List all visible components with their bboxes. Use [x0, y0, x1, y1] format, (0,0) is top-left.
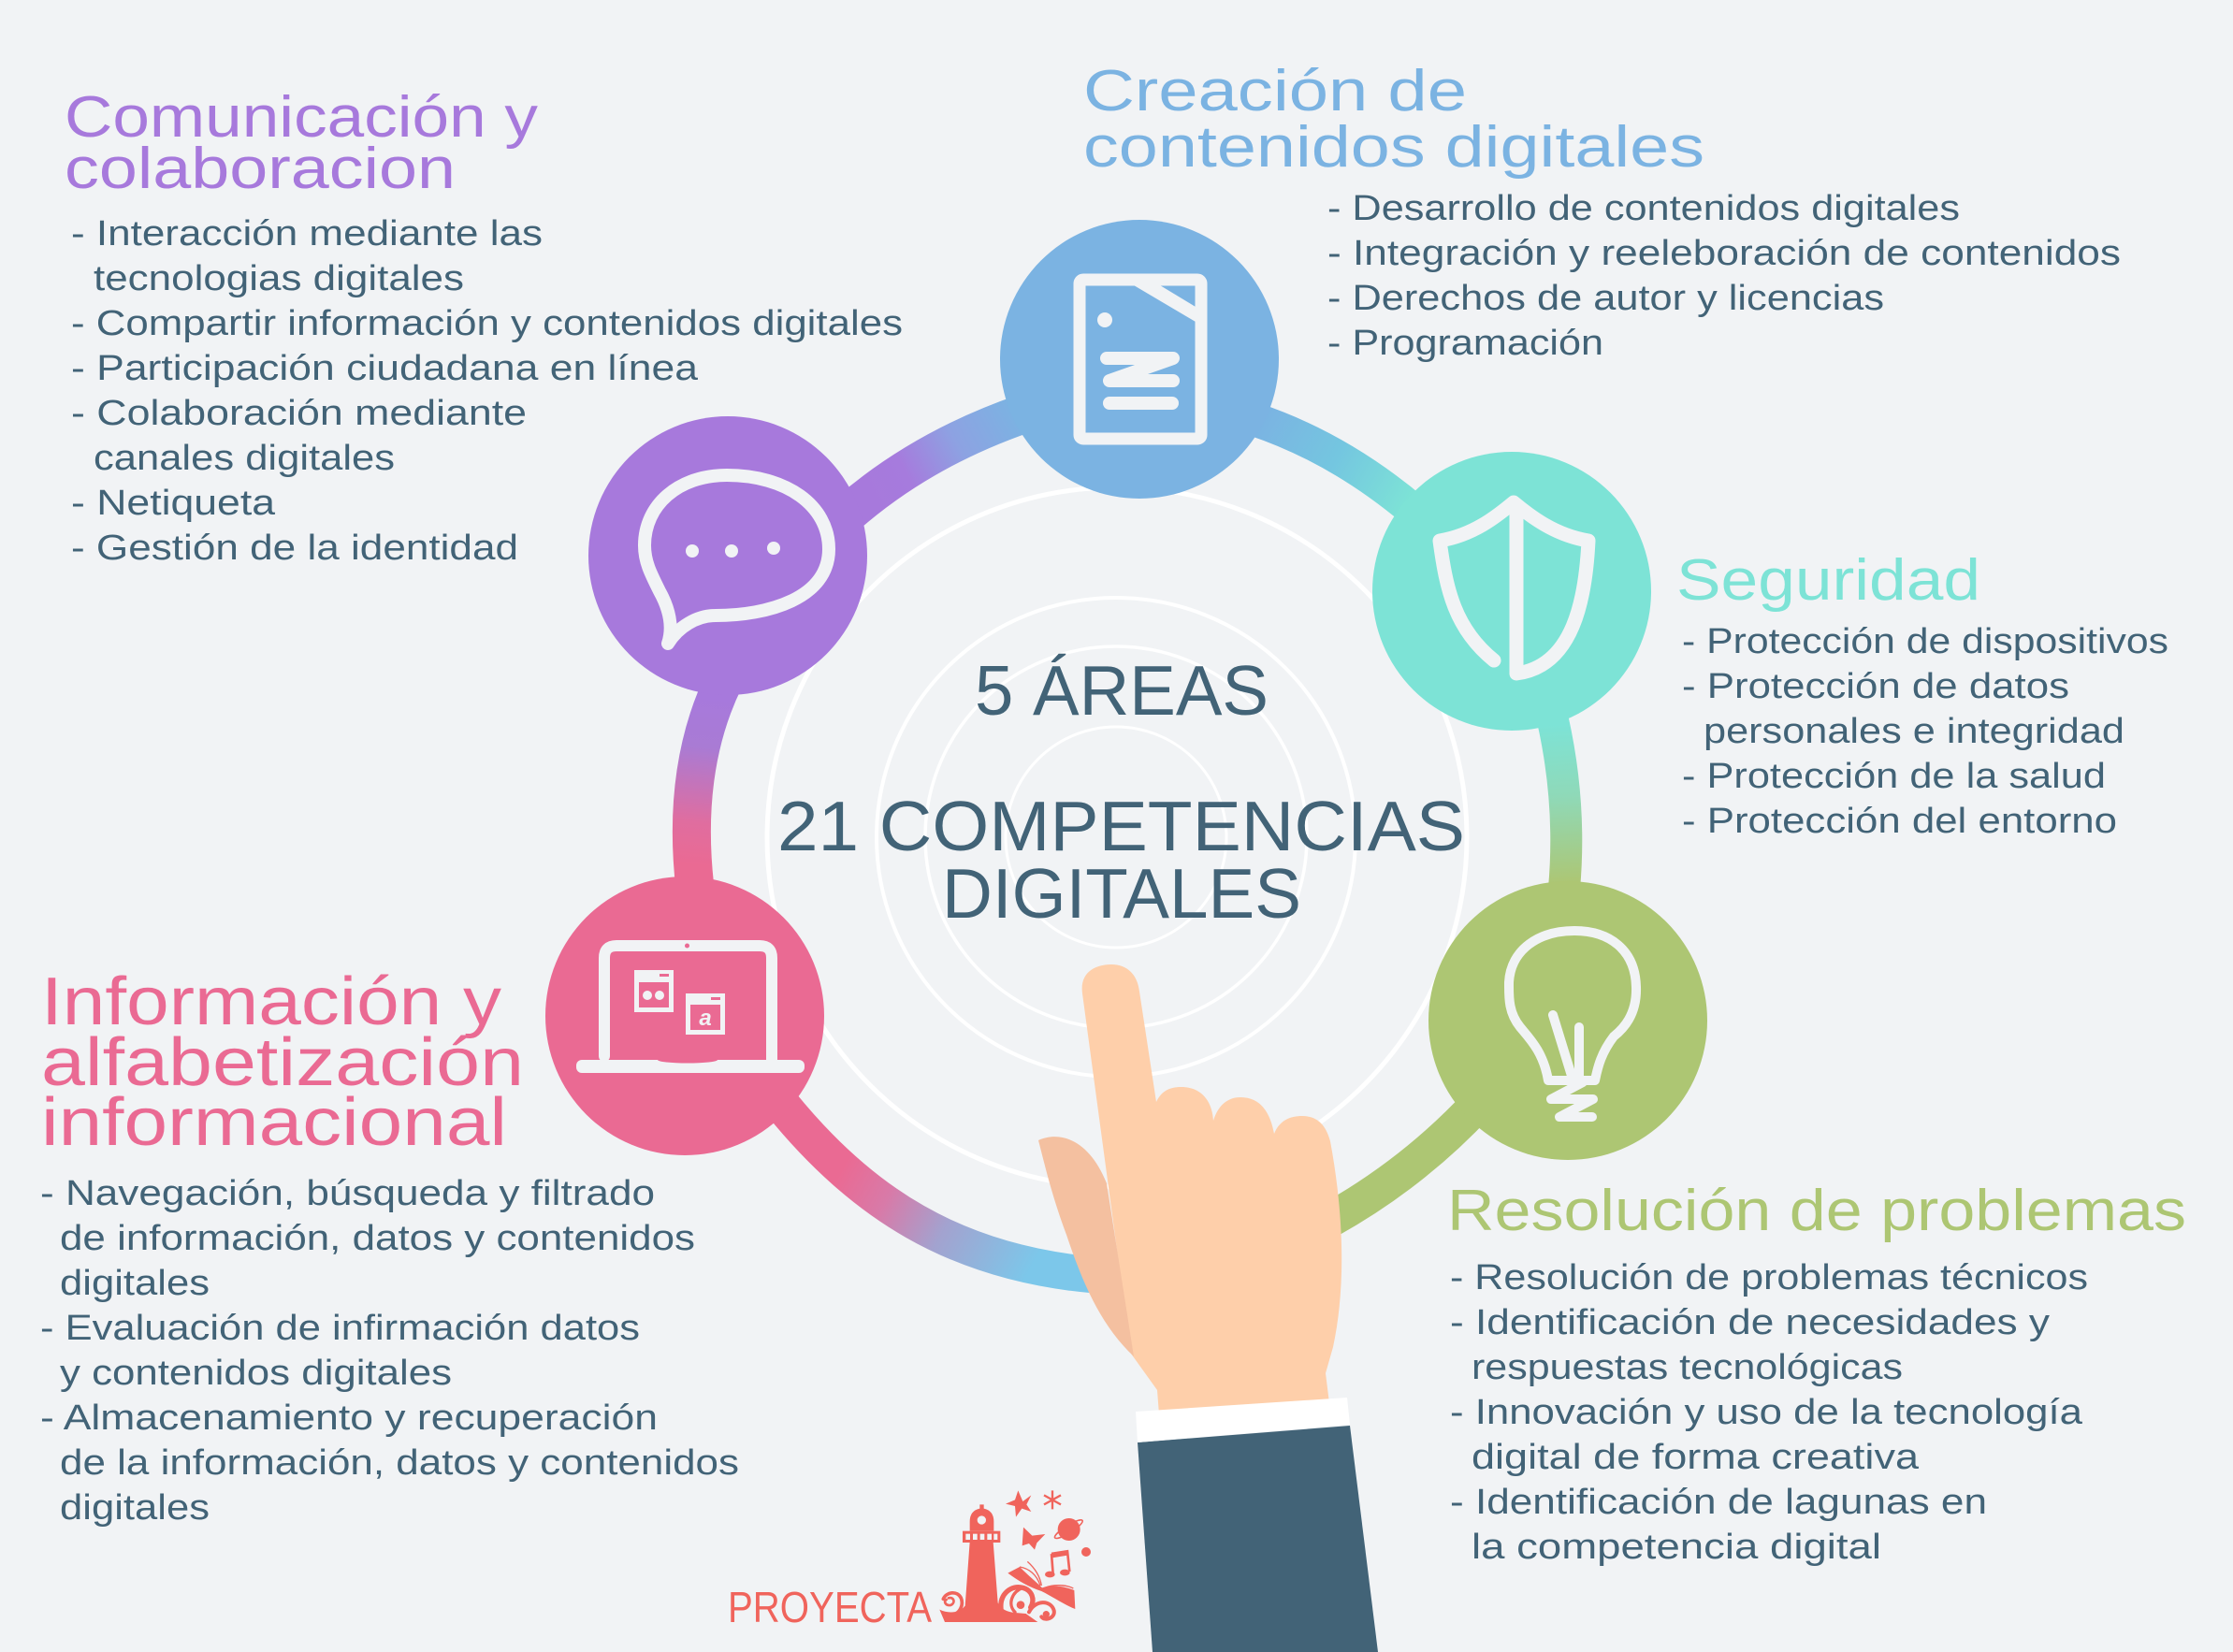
list: resolución: - Innovación y uso de la tecnología: [1450, 1393, 2083, 1432]
list: información: - Evaluación de infirmación datos: [40, 1309, 640, 1348]
connecting ring arcs: [691, 413, 1566, 1275]
list: comunicación: - Participación ciudadana en línea: [71, 349, 699, 388]
list: resolución: la competencia digital: [1472, 1528, 1881, 1567]
heading: información y alfabetización informacional: Información y: [41, 964, 501, 1039]
circle: seguridad, shield icon: [1372, 452, 1651, 731]
list: información: digitales: [60, 1264, 210, 1303]
list: comunicación: - Gestión de la identidad: [71, 529, 518, 568]
heading: información y alfabetización informacional: [41, 964, 524, 1160]
list: seguridad: [1682, 622, 2168, 841]
heading: seguridad: Seguridad: [1676, 548, 1980, 613]
list: creación: [1327, 189, 2121, 363]
heading: información y alfabetización informacional: informacional: [41, 1085, 507, 1160]
pointing hand: [1038, 964, 1378, 1652]
list: resolución: - Identificación de lagunas en: [1450, 1483, 1987, 1522]
heading: creación de contenidos digitales: contenidos digitales: [1083, 115, 1704, 180]
heading: creación de contenidos digitales: [1083, 59, 1704, 180]
heading: resolución de problemas: Resolución de problemas: [1447, 1179, 2186, 1243]
list: seguridad: - Protección de datos: [1682, 667, 2069, 706]
heading: comunicación y colaboración: Comunicación y: [65, 85, 538, 150]
list: resolución: respuestas tecnológicas: [1472, 1348, 1903, 1387]
list: información: - Navegación, búsqueda y filtrado: [40, 1174, 655, 1213]
circle: creación, document icon: [1000, 220, 1279, 499]
center title: DIGITALES: [942, 854, 1301, 933]
logo: Proyecta: [728, 1490, 1091, 1631]
heading: comunicación y colaboración: colaboracion: [65, 137, 456, 201]
center title: 21 COMPETENCIAS: [777, 787, 1465, 865]
list: creación: - Desarrollo de contenidos digitales: [1327, 189, 1960, 228]
list: comunicación: - Colaboración mediante: [71, 394, 527, 433]
list: información: de información, datos y contenidos: [60, 1219, 695, 1258]
list: información: y contenidos digitales: [60, 1354, 452, 1393]
logo: Proyecta: PROYECTA: [728, 1583, 932, 1631]
list: resolución: - Resolución de problemas técnicos: [1450, 1258, 2088, 1297]
list: comunicación: - Compartir información y contenidos digitales: [71, 304, 903, 343]
heading: creación de contenidos digitales: Creación de: [1083, 59, 1467, 123]
circle: información, laptop icon: [545, 877, 824, 1155]
list: resolución: [1450, 1258, 2088, 1567]
center title: [777, 651, 1465, 933]
list: seguridad: - Protección de dispositivos: [1682, 622, 2168, 661]
circle: información, laptop icon: a: [699, 1006, 712, 1031]
list: información: - Almacenamiento y recuperación: [40, 1398, 658, 1438]
list: resolución: digital de forma creativa: [1472, 1438, 1920, 1477]
list: comunicación: canales digitales: [94, 439, 395, 478]
list: información: de la información, datos y contenidos: [60, 1443, 739, 1483]
list: comunicación: [71, 214, 903, 568]
list: comunicación: - Interacción mediante las: [71, 214, 543, 254]
heading: comunicación y colaboración: [65, 85, 538, 201]
list: seguridad: - Protección de la salud: [1682, 757, 2106, 796]
heading: información y alfabetización informacional: alfabetización: [41, 1025, 524, 1100]
list: comunicación: tecnologias digitales: [94, 259, 464, 298]
concentric white rings: [767, 487, 1467, 1187]
list: creación: - Programación: [1327, 324, 1603, 363]
circle: resolución, light bulb icon: [1428, 881, 1707, 1160]
list: creación: - Integración y reeleboración de contenidos: [1327, 234, 2121, 273]
center title: 5 ÁREAS: [975, 651, 1269, 730]
circle: comunicación, speech bubble icon: [588, 416, 867, 695]
list: seguridad: - Protección del entorno: [1682, 802, 2117, 841]
list: seguridad: personales e integridad: [1704, 712, 2124, 751]
list: creación: - Derechos de autor y licencias: [1327, 279, 1884, 318]
list: resolución: - Identificación de necesidades y: [1450, 1303, 2050, 1342]
list: comunicación: - Netiqueta: [71, 484, 276, 523]
list: información: digitales: [60, 1488, 210, 1528]
list: información: [40, 1174, 739, 1528]
